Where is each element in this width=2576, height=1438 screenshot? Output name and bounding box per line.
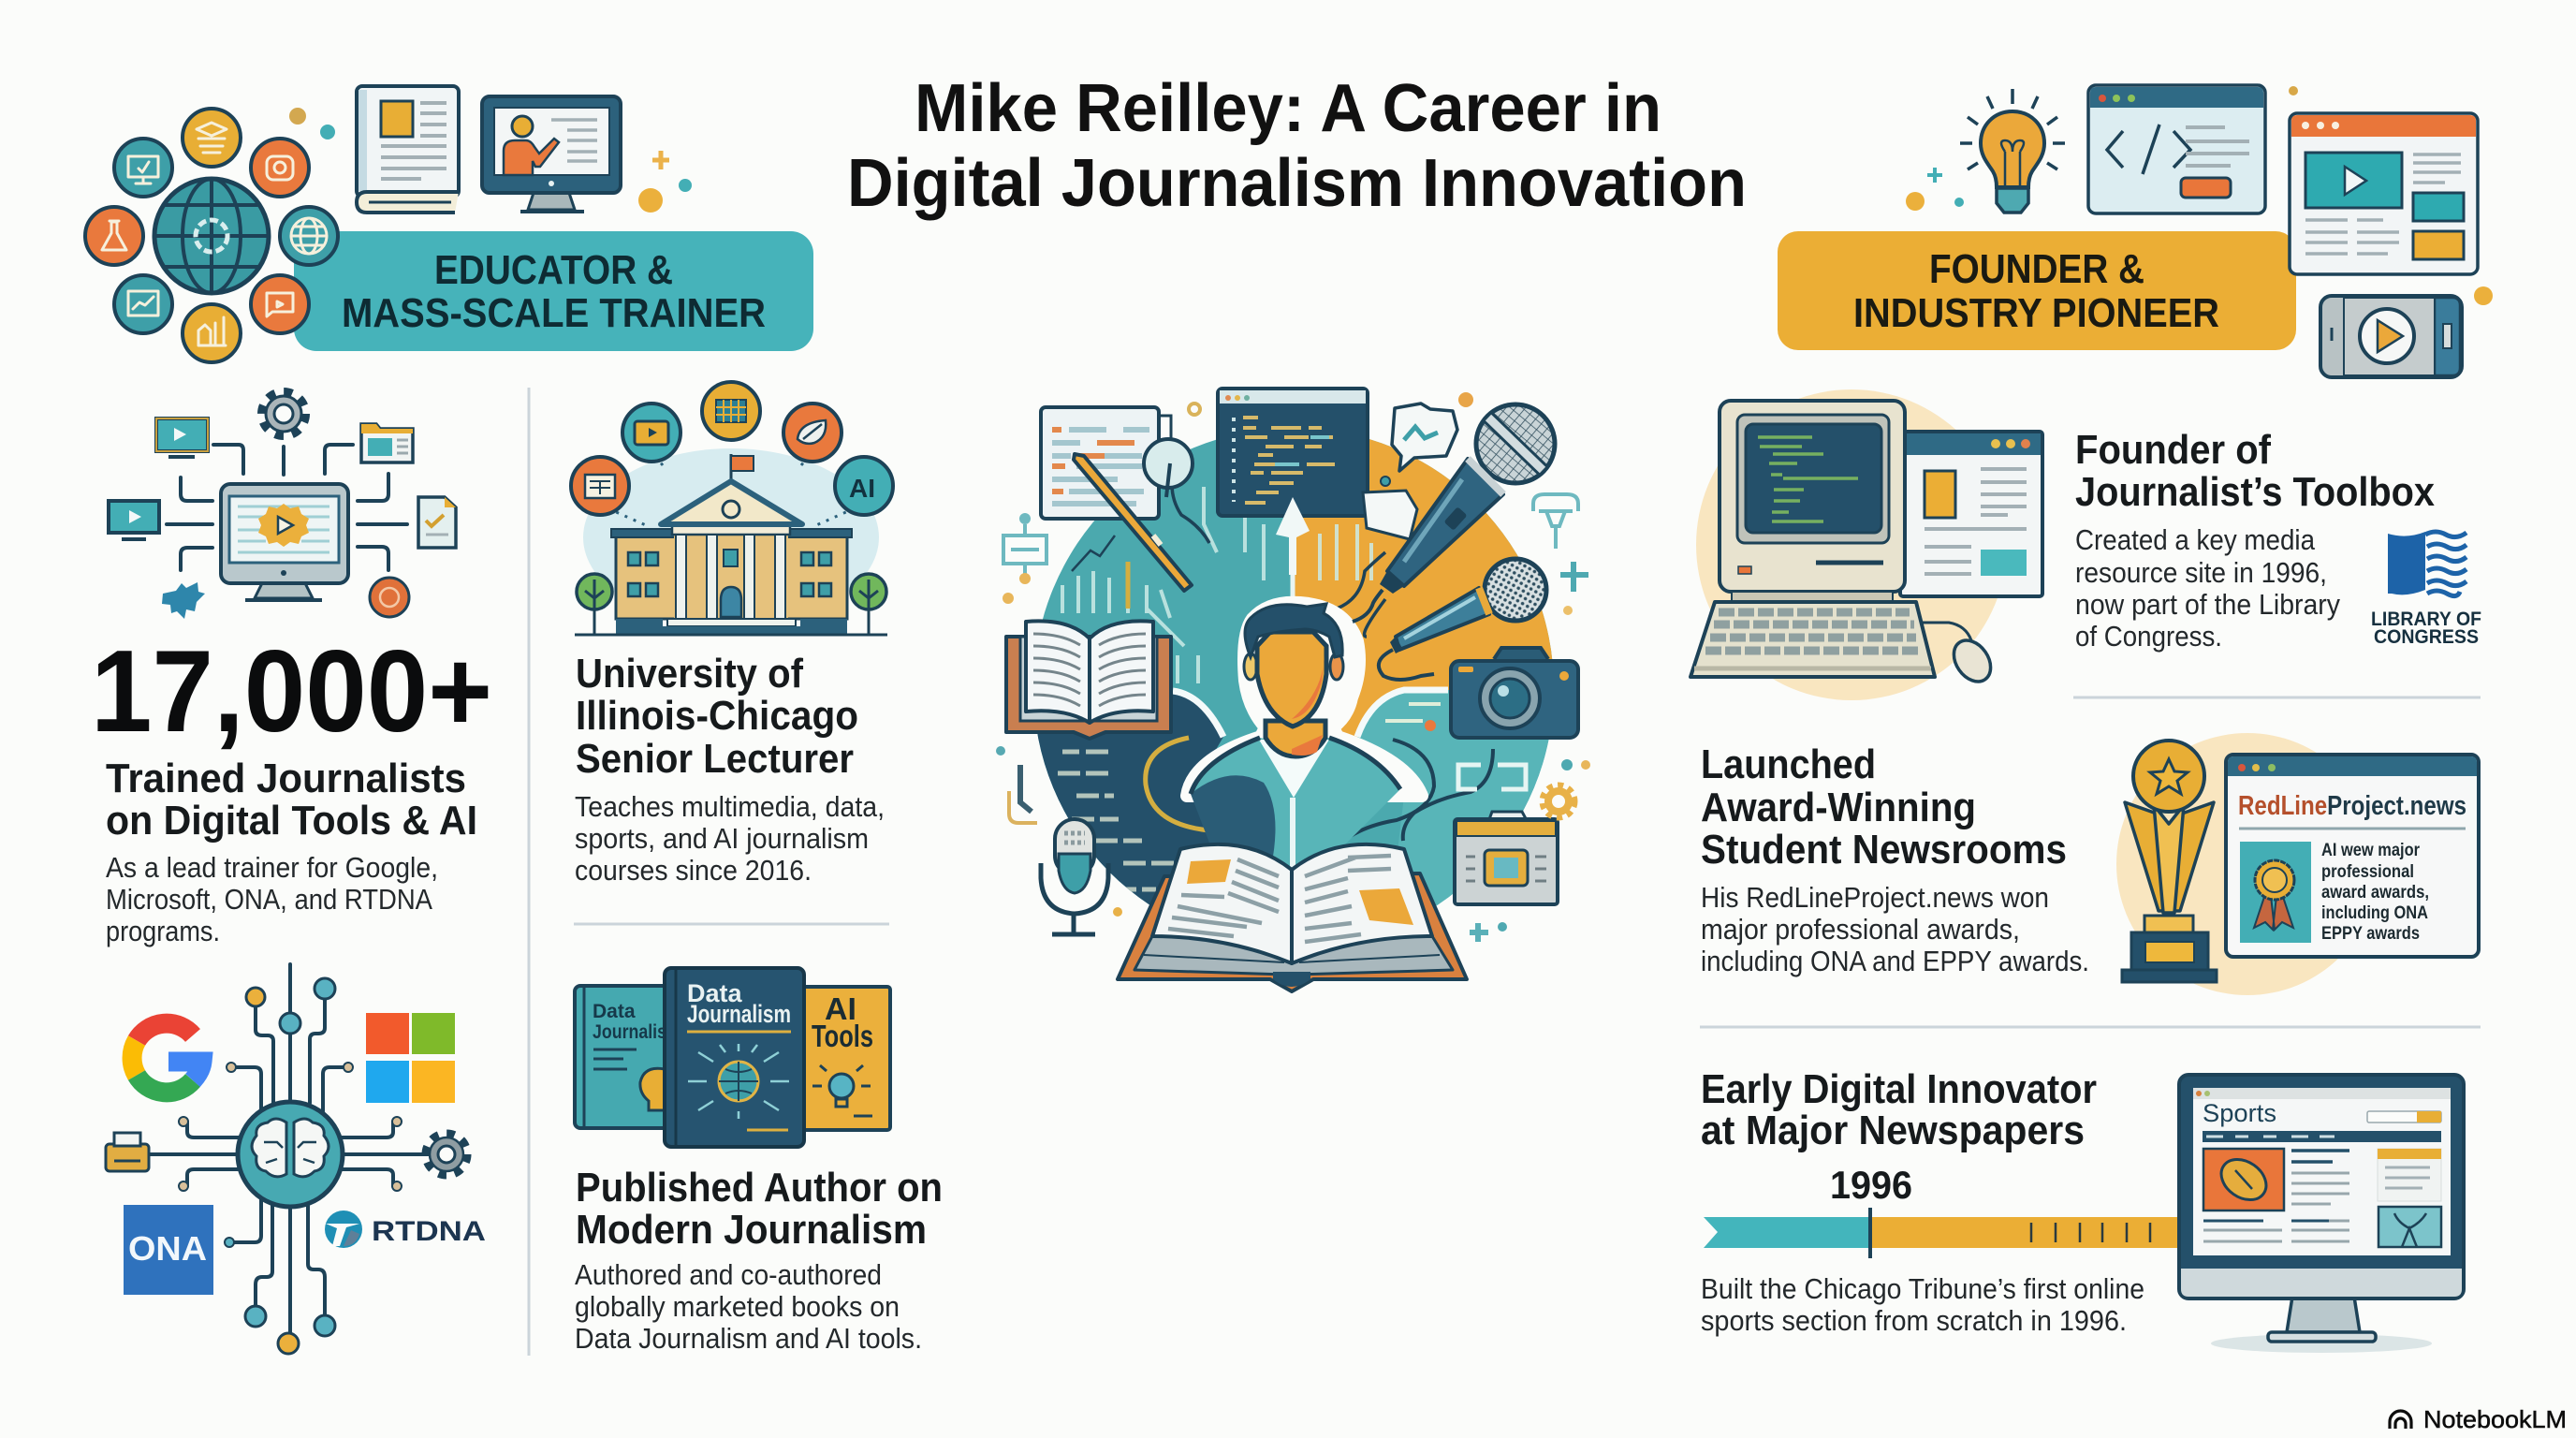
text: author description: [575, 1258, 922, 1355]
heading: student newsrooms: Student Newsrooms: [1701, 827, 2067, 873]
icon: sports page on monitor: [2179, 1075, 2464, 1353]
banner: educator: EDUCATOR &: [434, 247, 673, 293]
logo: ONA: [124, 1205, 213, 1295]
heading: trained journalists: Trained Journalists: [106, 756, 466, 801]
text: university description: courses since 2016.: [575, 854, 812, 887]
microphone small: [1379, 559, 1546, 680]
heading: published author: Published Author on: [576, 1165, 943, 1211]
icon: books: Data: [687, 979, 743, 1007]
award summary text: AI wew major: [2321, 841, 2421, 860]
text: toolbox description: now part of the Library: [2075, 588, 2340, 621]
text: early innovator description: sports section from scratch in 1996.: [1701, 1304, 2127, 1337]
stat: 17,000+: 17,000+: [91, 627, 492, 756]
heading: founder of toolbox: Journalist’s Toolbox: [2075, 469, 2435, 515]
heading: trained journalists: [106, 756, 477, 844]
banner: founder: FOUNDER &: [1929, 246, 2144, 292]
background circle quadrants: [1037, 439, 1552, 906]
timeline: 1996: [1704, 1163, 2181, 1258]
title: Mike Reilley: A Career in: [915, 71, 1661, 146]
text: university description: Teaches multimedia, data,: [575, 790, 885, 823]
logo: Library of Congress: CONGRESS: [2374, 626, 2479, 648]
text: early innovator description: [1701, 1272, 2144, 1337]
mic stand: [1041, 819, 1108, 934]
text: student newsrooms description: His RedLineProject.news won: [1701, 881, 2049, 914]
logo: ONA: ONA: [128, 1229, 207, 1268]
logo: Microsoft: [366, 1013, 455, 1103]
icon: sports page on monitor: Sports: [2203, 1099, 2276, 1127]
heading: early digital innovator: at Major Newspapers: [1701, 1108, 2085, 1153]
icon: books: Data: [593, 1001, 636, 1022]
text: trainer description: Microsoft, ONA, and RTDNA: [106, 883, 432, 916]
text: trainer description: As a lead trainer for Google,: [106, 851, 438, 884]
banner: educator: MASS-SCALE TRAINER: [342, 290, 766, 336]
banner: educator: [294, 231, 813, 351]
logo: RTDNA: RTDNA: [372, 1216, 486, 1247]
microphone large: [1353, 404, 1555, 622]
text: author description: Data Journalism and AI tools.: [575, 1322, 922, 1355]
heading: student newsrooms: Launched: [1701, 741, 1876, 787]
doc panel: [1041, 407, 1193, 519]
text: toolbox description: of Congress.: [2075, 620, 2222, 653]
heading: student newsrooms: Award-Winning: [1701, 785, 1976, 830]
heading: early digital innovator: Early Digital Innovator: [1701, 1066, 2097, 1112]
text: author description: Authored and co-authored: [575, 1258, 882, 1291]
icon: books: [575, 968, 890, 1147]
icon: books: AI: [825, 991, 856, 1026]
text: university description: sports, and AI journalism: [575, 822, 869, 855]
banner: founder: [1778, 231, 2296, 350]
floating accents: [996, 392, 1590, 942]
pencil: [1074, 454, 1192, 591]
big open book: [1118, 844, 1467, 991]
heading: student newsrooms: [1701, 741, 2067, 873]
logo: Library of Congress: LIBRARY OF: [2371, 609, 2481, 630]
person: [1187, 603, 1422, 873]
decorative dots left: [289, 108, 692, 213]
logo: Library of Congress: [2371, 532, 2481, 648]
code panel: [1218, 389, 1368, 516]
heading: founder of toolbox: [2075, 427, 2435, 515]
icon: video web page: [2290, 113, 2478, 274]
heading: university: University of: [576, 651, 803, 697]
icon: university building: AI: [849, 474, 875, 503]
text: toolbox description: resource site in 1996,: [2075, 556, 2327, 589]
icon: light bulb: [1906, 89, 2065, 213]
left open book: [1006, 621, 1171, 739]
title: Digital Journalism Innovation: [847, 146, 1747, 221]
heading: published author: Modern Journalism: [576, 1207, 927, 1253]
logo: RTDNA: [325, 1211, 486, 1248]
icon: instructor on monitor: [482, 96, 621, 212]
icon: retro computer with browser: [1690, 389, 2042, 700]
heading: university: [576, 651, 858, 782]
timeline: 1996: 1996: [1830, 1163, 1912, 1207]
heading: early digital innovator: [1701, 1066, 2097, 1153]
text: trainer description: programs.: [106, 915, 220, 947]
watermark: NotebookLM: NotebookLM: [2423, 1405, 2567, 1433]
text: toolbox description: [2075, 523, 2340, 653]
heading: university: Illinois-Chicago: [576, 693, 858, 739]
award summary text: [2321, 841, 2429, 944]
diagram: AI brain circuit: [106, 964, 467, 1354]
heading: university: Senior Lecturer: [576, 736, 854, 782]
award summary text: professional: [2321, 862, 2414, 882]
text: early innovator description: Built the Chicago Tribune’s first online: [1701, 1272, 2144, 1305]
icon: university building: [571, 382, 893, 635]
text: author description: globally marketed books on: [575, 1290, 900, 1323]
small camera: [1455, 812, 1558, 904]
text: university description: [575, 790, 885, 887]
camera: [1451, 648, 1578, 738]
icon: RedLineProject web page: RedLineProject.news: [2238, 791, 2466, 821]
icon: RedLineProject web page: [2226, 755, 2479, 957]
icon: educator globe cluster: [85, 109, 338, 362]
text: student newsrooms description: including ONA and EPPY awards.: [1701, 945, 2089, 977]
heading: trained journalists: on Digital Tools & AI: [106, 798, 477, 844]
award summary text: EPPY awards: [2321, 924, 2420, 944]
arrow up: [1276, 497, 1310, 575]
icon: books: Tools: [812, 1019, 873, 1053]
award summary text: award awards,: [2321, 883, 2429, 902]
title: [847, 71, 1747, 221]
icon: book: [357, 86, 459, 213]
award summary text: including ONA: [2321, 903, 2428, 923]
text: student newsrooms description: major professional awards,: [1701, 913, 2020, 946]
banner: founder: INDUSTRY PIONEER: [1853, 290, 2219, 336]
logo: Google: [132, 1023, 202, 1093]
icon: trophy: [2116, 733, 2378, 995]
text: toolbox description: Created a key media: [2075, 523, 2316, 556]
text: trainer description: [106, 851, 438, 947]
icon: training network monitor: [109, 392, 456, 619]
icon: code window: [2088, 85, 2265, 213]
illustration: central journalist collage: [996, 389, 1590, 991]
icon: books: Journalism: [687, 1000, 791, 1028]
heading: published author: [576, 1165, 943, 1253]
heading: founder of toolbox: Founder of: [2075, 427, 2271, 473]
text: student newsrooms description: [1701, 881, 2089, 977]
speech bubble: [1363, 404, 1457, 539]
icon: phone with play button: [2289, 86, 2493, 377]
icon: books: Journalis: [593, 1021, 666, 1043]
